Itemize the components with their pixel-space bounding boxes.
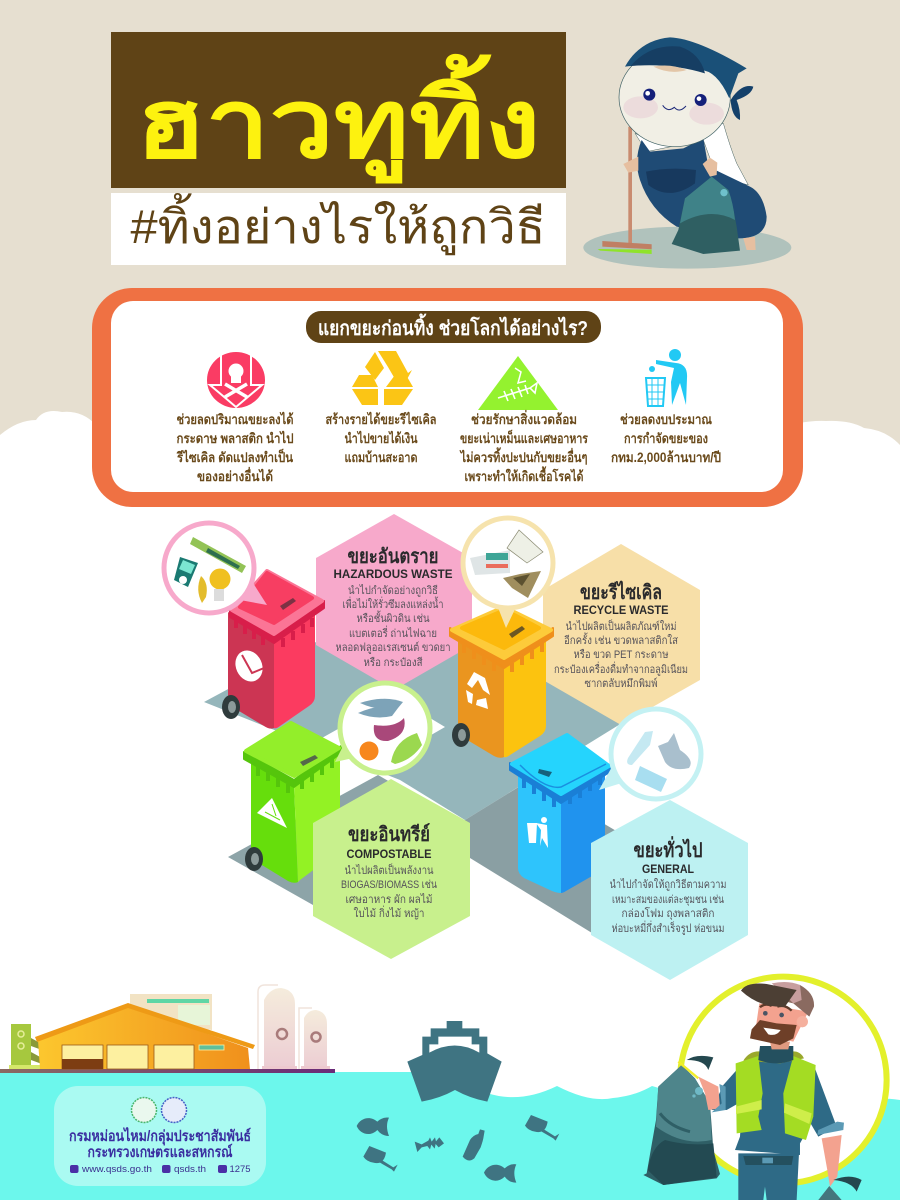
panel inner xyxy=(111,301,783,492)
benefit caption 2 xyxy=(326,411,436,465)
ring xyxy=(680,977,887,1183)
hexagon: recycle waste xyxy=(543,544,700,725)
facebook: qsds.th xyxy=(174,1164,206,1175)
hexagon: recycle waste: อีกครั้ง เช่น ขวดพลาสติกใส xyxy=(564,632,678,647)
benefit caption 3: ช่วยรักษาสิ่งแวดล้อม xyxy=(471,409,577,427)
icon: glass xyxy=(363,1146,398,1172)
hexagon: general: ห่อบะหมี่กึ่งสำเร็จรูป ห่อขนม xyxy=(612,920,724,935)
benefit caption 1: ช่วยลดปริมาณขยะลงได้ xyxy=(176,411,294,427)
hexagon: recycle waste: RECYCLE WASTE xyxy=(574,603,668,617)
background: white cloud xyxy=(0,411,900,1200)
hexagon: general: ขยะทั่วไป xyxy=(634,835,702,862)
hexagon: general xyxy=(591,800,748,980)
icon: hazard skull xyxy=(207,352,265,408)
hexagon: general: นำไปกำจัดให้ถูกวิธีตามความ xyxy=(610,878,726,891)
hexagon: recycle waste: นำไปผลิตเป็นผลิตภัณฑ์ใหม่ xyxy=(566,619,676,633)
benefit caption 4: การกำจัดขยะของ xyxy=(624,431,708,446)
phone: 1275 xyxy=(230,1164,250,1175)
title text: ฮาวทูทิ้ง xyxy=(136,53,540,184)
hexagon: general: เหมาะสมของแต่ละชุมชน เช่น xyxy=(612,894,724,906)
hexagon: hazardous waste: หรือชั้นผิวดิน เช่น xyxy=(356,610,430,625)
panel frame xyxy=(92,288,803,507)
hexagon: hazardous waste: HAZARDOUS WASTE xyxy=(334,567,452,581)
icon: glass 2 xyxy=(525,1115,559,1141)
hexagon: compostable: ใบไม้ กิ่งไม้ หญ้า xyxy=(354,905,424,920)
bin: green compostable xyxy=(244,723,341,883)
man figure xyxy=(698,982,862,1200)
hexagon: compostable xyxy=(313,779,470,959)
contact box xyxy=(54,1086,266,1186)
bubble: general items xyxy=(599,709,701,799)
benefit caption 4: กทม.2,000ล้านบาท/ปี xyxy=(611,450,721,465)
hexagon: compostable: นำไปผลิตเป็นพลังงาน xyxy=(344,863,434,877)
bin: blue general xyxy=(510,735,611,893)
icon: person throwing litter xyxy=(646,349,687,406)
panel heading pill xyxy=(306,311,601,343)
ministry name: กระทรวงเกษตรและสหกรณ์ xyxy=(88,1143,233,1161)
title banner xyxy=(111,32,566,188)
benefit caption 2: สร้างรายได้ขยะรีไซเคิล xyxy=(326,411,436,427)
hexagon: compostable: ขยะอินทรีย์ xyxy=(348,823,430,846)
panel: why separate waste xyxy=(92,288,803,507)
benefit caption 1: ของอย่างอื่นได้ xyxy=(197,466,273,484)
icon: recycle xyxy=(352,351,413,405)
subtitle text: #ทิ้งอย่างไรให้ถูกวิธี xyxy=(130,193,546,256)
hexagon: hazardous waste: แบตเตอรี่ ถ่านไฟฉาย xyxy=(349,625,437,640)
hexagon: compostable: เศษอาหาร ผัก ผลไม้ xyxy=(346,893,432,906)
title block xyxy=(111,32,566,265)
mascot: sweeping character with bag xyxy=(583,37,791,269)
benefit caption 1 xyxy=(176,411,294,484)
benefit caption 2: แถมบ้านสะอาด xyxy=(344,450,418,465)
benefit caption 3: ไม่ควรทิ้งปะปนกับขยะอื่นๆ xyxy=(459,447,588,465)
bin: red hazardous xyxy=(222,571,324,729)
hexagon: recycle waste: กระป๋องเครื่องดื่มทำจากอลูมิเนียม xyxy=(554,661,688,676)
hexagon: compostable: BIOGAS/BIOMASS เช่น xyxy=(341,879,437,891)
benefit caption 2: นำไปขายได้เงิน xyxy=(344,430,418,446)
hexagon: hazardous waste xyxy=(316,514,472,690)
man with garbage bags xyxy=(643,977,887,1200)
hexagon: recycle waste: หรือ ขวด PET กระดาษ xyxy=(574,648,668,661)
hexagon: hazardous waste: ขยะอันตราย xyxy=(348,546,438,568)
bin: yellow recycle xyxy=(450,607,553,758)
bubble: hazardous items xyxy=(164,523,267,613)
hexagon: general: กล่องโฟม ถุงพลาสติก xyxy=(622,906,714,920)
benefit caption 3: ขยะเน่าเหม็นและเศษอาหาร xyxy=(460,429,589,446)
icon: fish xyxy=(357,1117,389,1136)
contact icons xyxy=(70,1165,227,1173)
hexagon: hazardous waste: หรือ กระป๋องสี xyxy=(364,656,423,669)
benefit caption 4: ช่วยลดงบประมาณ xyxy=(620,412,712,427)
background: turquoise water xyxy=(0,1072,900,1200)
icon: bottle xyxy=(463,1129,485,1160)
benefit caption 1: กระดาษ พลาสติก นำไป xyxy=(176,430,294,446)
icon: ship xyxy=(407,1021,502,1102)
isometric floor xyxy=(204,597,640,933)
benefit caption 3: เพราะทำให้เกิดเชื้อโรคได้ xyxy=(464,466,584,484)
hexagon: hazardous waste: นำไปกำจัดอย่างถูกวิธี xyxy=(348,584,438,597)
icon: triangle with fish bone xyxy=(478,356,558,410)
bag xyxy=(643,1056,720,1185)
icon: fish 2 xyxy=(484,1164,516,1183)
factory scene xyxy=(0,985,335,1073)
seal: right xyxy=(162,1098,186,1122)
seal: left xyxy=(132,1098,156,1122)
benefit caption 3 xyxy=(459,409,589,484)
hexagon: recycle waste: ขยะรีไซเคิล xyxy=(580,580,662,604)
hexagon: general: GENERAL xyxy=(642,862,694,876)
website: www.qsds.go.th xyxy=(81,1164,152,1175)
hexagon: hazardous waste: เพื่อไม่ให้รั่วซึมลงแหล่งน้ำ xyxy=(342,596,444,611)
hexagon: compostable: COMPOSTABLE xyxy=(346,847,432,861)
benefit caption 1: รีไซเคิล ดัดแปลงทำเป็น xyxy=(176,448,294,465)
subtitle banner xyxy=(111,193,566,265)
bubble: compost items xyxy=(335,683,430,773)
hexagon: recycle waste: ซากตลับหมึกพิมพ์ xyxy=(584,677,658,690)
hexagon: hazardous waste: หลอดฟลูออเรสเซนต์ ขวดยา xyxy=(336,641,450,654)
benefit caption 4 xyxy=(611,412,721,465)
bubble: recycle items xyxy=(463,518,553,628)
icon: fish bone xyxy=(415,1137,444,1152)
ship and ocean debris xyxy=(357,1021,559,1183)
panel heading text: แยกขยะก่อนทิ้ง ช่วยโลกได้อย่างไร? xyxy=(318,313,588,340)
department name: กรมหม่อนไหม/กลุ่มประชาสัมพันธ์ xyxy=(69,1126,251,1146)
